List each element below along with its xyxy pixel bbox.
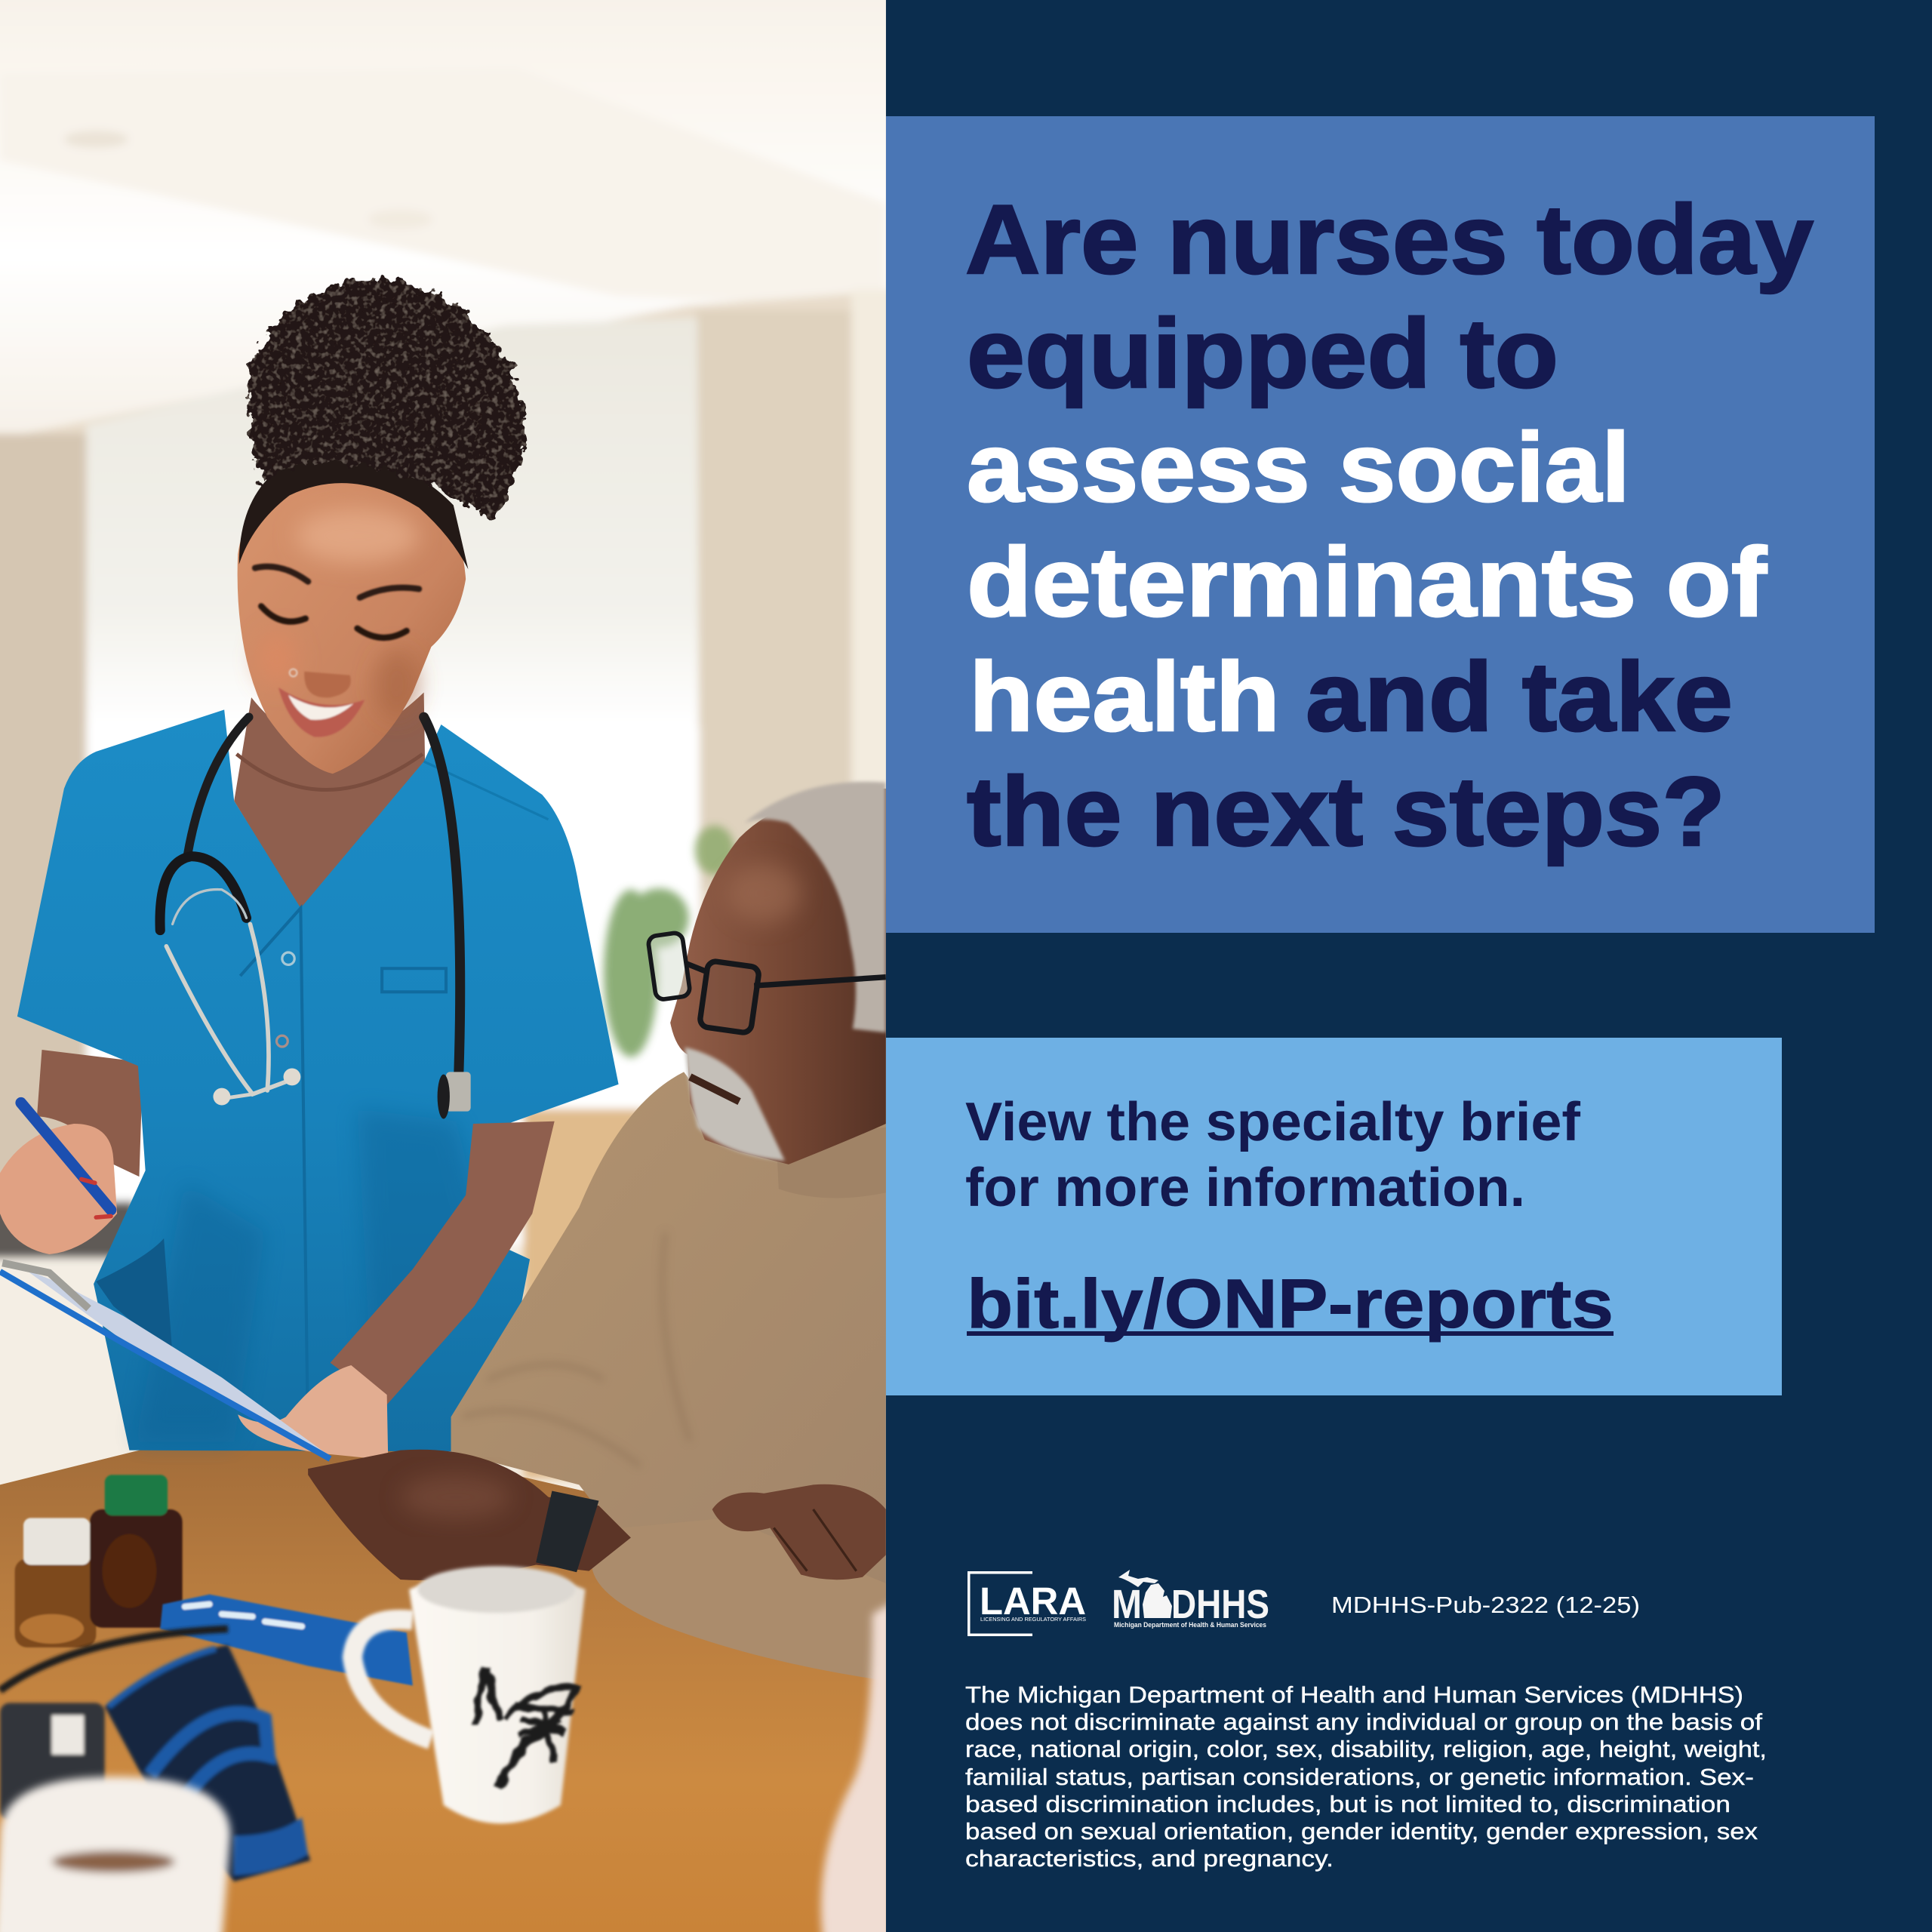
panel: call to action (886, 1038, 1782, 1395)
logo: MDHHS: Michigan Department of Health & Human Services (1114, 1621, 1266, 1629)
room background (0, 0, 912, 1932)
call to action text (965, 1092, 1581, 1218)
face highlights (257, 509, 419, 718)
call to action text: for more information. (965, 1158, 1525, 1218)
non-discrimination statement: The Michigan Department of Health and Human Services (MDHHS) (965, 1681, 1743, 1708)
non-discrimination statement: based discrimination includes, but is not limited to, discrimination (965, 1791, 1730, 1817)
logo: LARA (968, 1571, 1086, 1636)
non-discrimination statement: based on sexual orientation, gender identity, gender expression, sex (965, 1818, 1758, 1844)
panel: headline (886, 116, 1875, 933)
link: bit.ly/ONP-reports (967, 1266, 1614, 1343)
headline text (965, 184, 1814, 866)
watch (536, 1491, 598, 1572)
head (670, 789, 886, 1164)
headline text: assess social (967, 412, 1630, 522)
hair puff (249, 278, 525, 524)
non-discrimination statement: race, national origin, color, sex, disability, religion, age, height, weight, (965, 1736, 1767, 1762)
hand on forearm (712, 1484, 886, 1580)
pill organizer (160, 1595, 413, 1685)
glasses (648, 932, 886, 1033)
logo: MDHHS: M (1112, 1582, 1142, 1627)
non-discrimination statement (965, 1681, 1767, 1872)
beard (685, 1048, 785, 1161)
forehead highlight (727, 863, 801, 923)
scrub folds (136, 1109, 487, 1441)
logo: MDHHS: DHHS (1171, 1582, 1269, 1627)
hand highlight (401, 1475, 512, 1519)
headline text: and take (1306, 641, 1733, 752)
publication number: MDHHS-Pub-2322 (12-25) (1331, 1592, 1640, 1618)
scrub top (17, 709, 619, 1451)
non-discrimination statement: does not discriminate against any individual or group on the basis of (965, 1709, 1762, 1735)
sweater folds (462, 1232, 690, 1466)
logo: MDHHS (1112, 1570, 1269, 1629)
headline text: health (969, 641, 1280, 752)
non-discrimination statement: characteristics, and pregnancy. (965, 1845, 1334, 1872)
logo: LARA: LARA (980, 1580, 1086, 1623)
pen hand (0, 1124, 117, 1254)
medicine bottles (15, 1475, 183, 1647)
table (0, 1427, 886, 1932)
logo: LARA: LICENSING AND REGULATORY AFFAIRS (980, 1616, 1086, 1623)
sweater (451, 1072, 886, 1601)
headline text: equipped to (967, 298, 1558, 408)
clipboard (0, 1263, 331, 1459)
plant (604, 826, 734, 1057)
nurse hand on clipboard (238, 1365, 388, 1460)
blood pressure cuff (0, 1629, 310, 1881)
headline text: Are nurses today (965, 184, 1814, 294)
turtleneck (234, 693, 425, 912)
brown right sleeve (331, 1121, 555, 1404)
photo: nurse and patient at table (0, 0, 912, 1932)
pink shoulder foreground (821, 1601, 894, 1932)
left brown sleeve (37, 1050, 143, 1177)
non-discrimination statement: familial status, partisan considerations, or genetic information. Sex- (965, 1764, 1754, 1790)
brows and eyes (255, 567, 419, 737)
nurse (0, 278, 619, 1460)
mug with scribble (352, 1566, 586, 1823)
hair band over scalp (239, 456, 468, 569)
face and neck (238, 478, 466, 774)
headline text: the next steps? (967, 756, 1725, 866)
grey hair (744, 782, 886, 1032)
hand holding clipboard (308, 1450, 631, 1580)
foreground cup (0, 1777, 230, 1932)
forearm on table (592, 1518, 886, 1681)
turtleneck collar (777, 1128, 886, 1198)
patient (308, 782, 886, 1681)
fingernails (82, 1179, 111, 1217)
right background panel (886, 0, 1932, 1932)
call to action text: View the specialty brief (965, 1092, 1581, 1152)
headline text: determinants of (967, 527, 1767, 637)
stethoscope (160, 717, 460, 1099)
smile (278, 688, 365, 737)
